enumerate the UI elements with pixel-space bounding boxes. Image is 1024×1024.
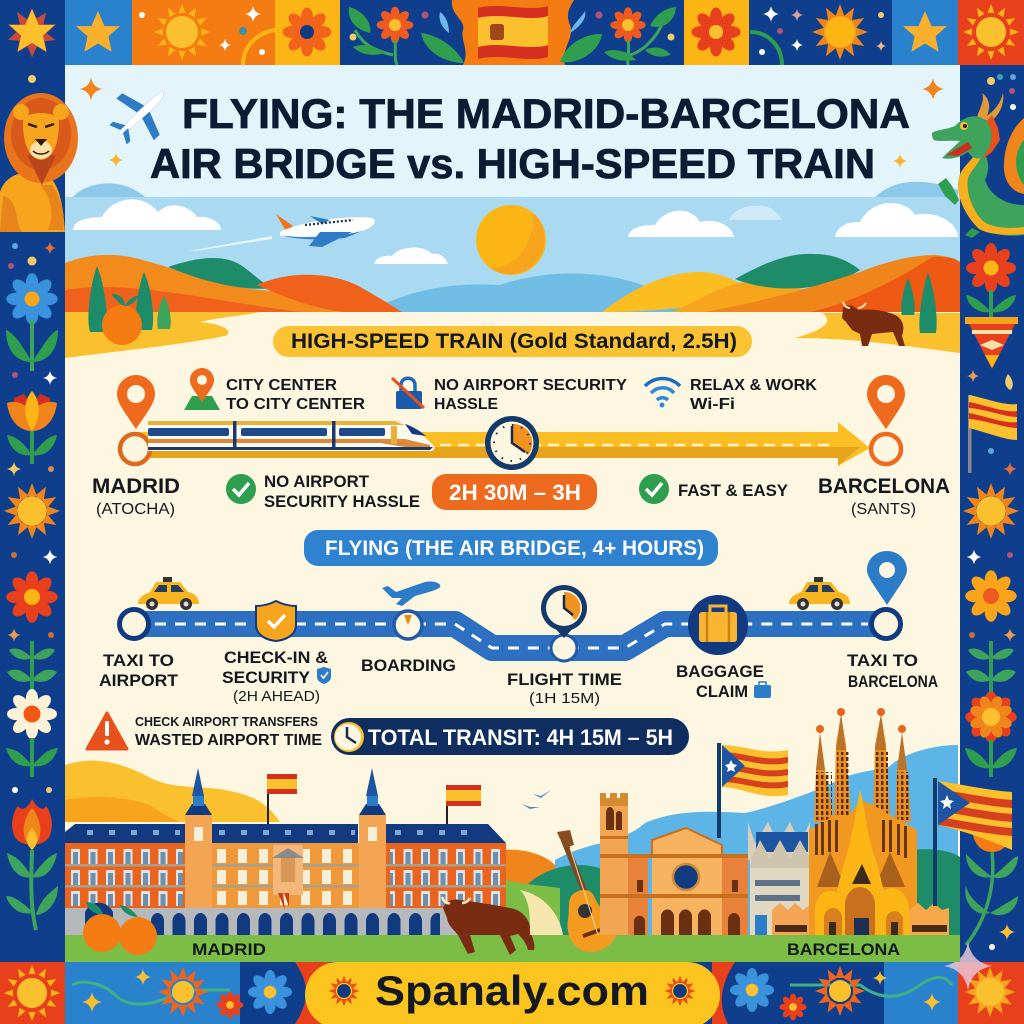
label: check-in and security: CHECK-IN & <box>224 648 328 667</box>
heading: high-speed train: HIGH-SPEED TRAIN (Gold Standard, 2.5H) <box>291 330 737 353</box>
right decorative column <box>960 65 1024 962</box>
footer pill: Spanaly.com: Spanaly.com <box>375 967 649 1014</box>
sky and hills landscape <box>65 197 1000 358</box>
top decorative band <box>0 0 1024 65</box>
train benefit: no airport security <box>226 472 420 511</box>
icon: guitar <box>557 830 616 952</box>
label: Barcelona Sants: BARCELONA <box>818 475 950 498</box>
flags <box>267 774 481 828</box>
Gothic building <box>748 822 812 935</box>
icon: bull <box>442 897 534 955</box>
train features row: TO CITY CENTER <box>226 396 365 413</box>
header panel <box>65 65 960 197</box>
warning note <box>87 713 322 749</box>
train benefit: no airport security: SECURITY HASSLE <box>264 492 420 511</box>
label: taxi to airport: TAXI TO <box>103 651 174 670</box>
arcade <box>65 908 506 938</box>
red flower <box>966 243 1016 293</box>
warning note: CHECK AIRPORT TRANSFERS <box>135 715 318 729</box>
badge: total transit <box>331 718 689 755</box>
label: flight time: (1H 15M) <box>529 690 600 707</box>
marker: Madrid pin <box>117 375 155 429</box>
dragon horns <box>977 93 1003 123</box>
left trees <box>88 266 171 332</box>
footer pill: Spanaly.com <box>305 962 720 1024</box>
red flower <box>6 571 58 623</box>
label: baggage claim <box>676 662 771 701</box>
Catalan flag centre <box>717 743 788 838</box>
icon: jet in sky <box>189 214 375 251</box>
yellow flower <box>965 570 1017 622</box>
tulip under flag <box>972 825 1012 852</box>
label: Barcelona Sants: (SANTS) <box>851 501 916 518</box>
badge: train duration: 2H 30M – 3H <box>449 480 581 505</box>
heading: flying: FLYING (THE AIR BRIDGE, 4+ HOURS) <box>325 537 704 560</box>
label: boarding: BOARDING <box>361 656 456 675</box>
icon: taxi left <box>138 577 199 610</box>
Catalan flag right <box>933 778 1012 906</box>
bottom decorative band <box>0 942 1024 1024</box>
icon: baggage <box>688 595 748 655</box>
blue flower <box>6 273 58 325</box>
icon: wifi <box>645 378 680 408</box>
label: Barcelona Sants <box>818 475 950 518</box>
label: taxi to airport: AIRPORT <box>99 671 179 690</box>
label: Madrid Atocha: MADRID <box>92 475 180 498</box>
icon: taxi right <box>789 577 850 610</box>
navy cell details <box>750 32 782 65</box>
icon: bull upper right <box>842 302 905 346</box>
label: Madrid Atocha <box>92 475 180 518</box>
label: Madrid: MADRID <box>192 940 266 959</box>
left decorative column <box>0 65 65 962</box>
flame tulip <box>12 799 52 845</box>
sun flower <box>963 483 1019 539</box>
icon: clock on route <box>485 416 539 470</box>
left ground <box>65 312 1000 358</box>
label: Barcelona skyline: BARCELONA <box>787 940 900 959</box>
icon: destination pin <box>867 551 907 605</box>
badge: total transit: TOTAL TRANSIT: 4H 15M – 5H <box>368 725 673 750</box>
sun flower <box>4 483 60 539</box>
icon: lion <box>0 93 78 232</box>
label: flight time <box>507 670 622 707</box>
clouds <box>73 199 958 264</box>
catalan pennant <box>968 395 1017 473</box>
icon: train <box>148 421 435 451</box>
icon: dragon <box>932 93 1024 238</box>
icon: boarding node <box>394 611 422 639</box>
warning note: WASTED AIRPORT TIME <box>135 732 322 749</box>
sun <box>476 205 546 275</box>
label: baggage claim: CLAIM <box>696 682 748 701</box>
birds <box>522 790 551 809</box>
label: check-in and security: SECURITY <box>222 668 311 687</box>
dragon wing <box>1004 118 1024 194</box>
icon: security shield <box>256 601 296 641</box>
flag cell <box>452 0 574 65</box>
flowerpot triangle <box>965 317 1018 369</box>
Sagrada Familia <box>809 708 949 935</box>
train benefit: fast and easy: FAST & EASY <box>678 481 789 500</box>
bottom landscape hills <box>65 745 960 935</box>
orange flower <box>965 691 1017 743</box>
label: check-in and security: (2H AHEAD) <box>233 688 320 705</box>
label: taxi to barcelona: TAXI TO <box>847 651 918 670</box>
icon: plane <box>382 581 440 606</box>
train features row: CITY CENTER <box>226 377 337 394</box>
white flower <box>7 689 57 739</box>
left hills <box>65 255 402 312</box>
Madrid palace <box>65 768 506 938</box>
train features row <box>184 368 817 413</box>
train features row: RELAX & WORK <box>690 377 817 394</box>
badge: train duration <box>432 474 597 510</box>
trees right <box>901 272 937 333</box>
dragon mane <box>978 115 1000 158</box>
dragon body <box>958 147 1024 236</box>
label: check-in and security <box>222 648 331 705</box>
Barcelona church <box>600 793 748 935</box>
label: taxi to barcelona: BARCELONA <box>848 672 938 691</box>
dragon head <box>932 116 992 159</box>
marker: Barcelona pin <box>867 375 905 429</box>
title <box>80 73 944 187</box>
train route arrow <box>117 375 905 470</box>
tulip <box>14 394 50 420</box>
blue hills <box>367 274 700 312</box>
label: taxi to airport <box>99 651 179 690</box>
road path <box>520 890 563 935</box>
train features row: HASSLE <box>434 396 498 413</box>
heading: high-speed train <box>273 326 752 357</box>
heading: flying <box>304 530 718 566</box>
title: FLYING: THE MADRID-BARCELONA <box>182 90 910 137</box>
flower with leaves <box>610 7 646 43</box>
train benefit: no airport security: NO AIRPORT <box>264 472 370 491</box>
label: taxi to barcelona <box>847 651 938 691</box>
ground strip <box>65 935 960 962</box>
train features row: Wi-Fi <box>690 396 735 413</box>
icon: flight clock <box>541 585 587 661</box>
icon: map pin <box>184 368 220 410</box>
icon: airplane in title <box>99 73 183 156</box>
icon: orange with trees <box>102 294 142 345</box>
right hills <box>602 272 760 312</box>
roofs <box>65 824 506 843</box>
label: Madrid Atocha: (ATOCHA) <box>96 501 175 518</box>
flying route road <box>120 551 907 661</box>
mini flag on arcade <box>278 893 289 910</box>
icon: oranges <box>83 902 157 955</box>
walls <box>65 843 185 908</box>
label: baggage claim: BAGGAGE <box>676 662 764 681</box>
icon: lock crossed <box>392 378 424 409</box>
spanish flag <box>478 6 548 59</box>
train features row: NO AIRPORT SECURITY <box>434 377 627 394</box>
right ground <box>795 313 960 353</box>
label: flight time: FLIGHT TIME <box>507 670 622 689</box>
train benefit: fast and easy <box>639 474 789 504</box>
title: AIR BRIDGE vs. HIGH-SPEED TRAIN <box>150 140 875 187</box>
towers <box>185 768 386 908</box>
